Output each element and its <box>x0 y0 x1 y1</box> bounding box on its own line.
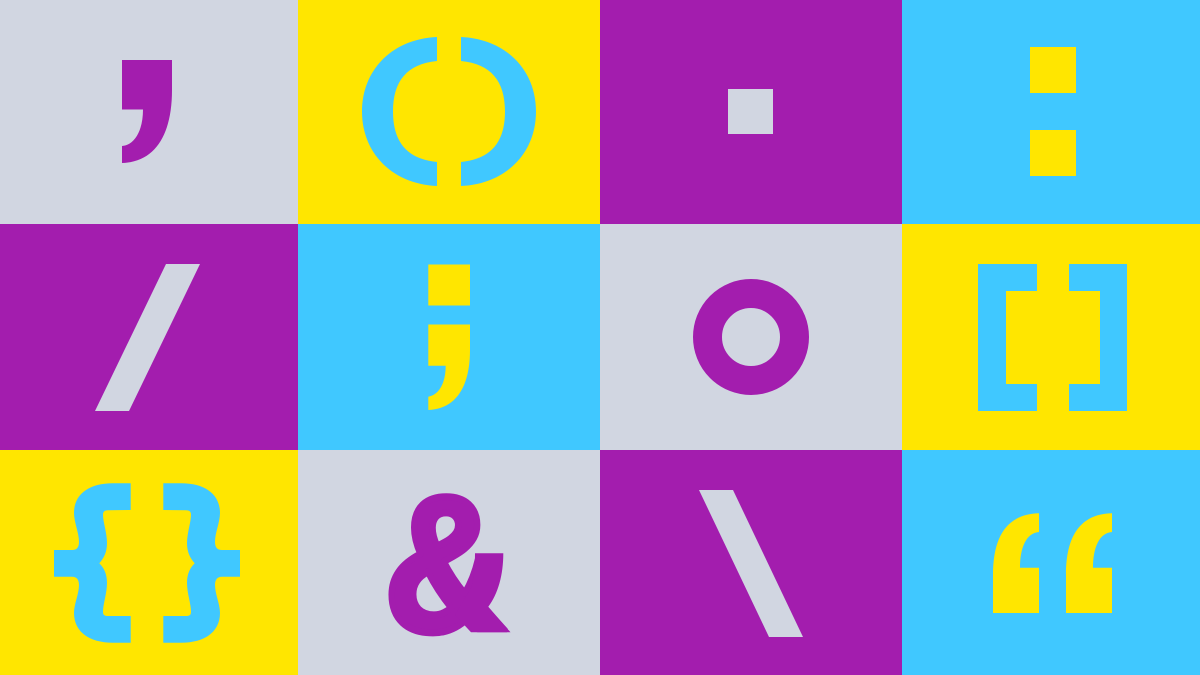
panel: backslash <box>600 450 902 675</box>
icon: ampersand: & <box>384 457 510 673</box>
panel: ring <box>600 224 902 450</box>
icon: period <box>728 89 773 134</box>
panel: square brackets <box>902 224 1200 450</box>
panel: quotation marks <box>902 450 1200 675</box>
panel: comma <box>0 0 298 224</box>
icon: backslash <box>699 490 803 637</box>
panel: ampersand <box>298 450 600 675</box>
panel: slash <box>0 224 298 450</box>
panel: curly braces <box>0 450 298 675</box>
icon: parentheses <box>362 37 536 186</box>
icon: quotation marks <box>993 513 1112 613</box>
icon: curly braces <box>54 483 240 643</box>
icon: square brackets <box>978 264 1127 411</box>
icon: semicolon <box>428 264 470 410</box>
panel: semicolon <box>298 224 600 450</box>
panel: parentheses <box>298 0 600 224</box>
icon: ring <box>708 294 794 380</box>
icon: comma <box>122 60 172 163</box>
panel: period <box>600 0 902 224</box>
icon: colon <box>1030 47 1076 176</box>
icon: slash <box>95 264 200 411</box>
panel: colon <box>902 0 1200 224</box>
